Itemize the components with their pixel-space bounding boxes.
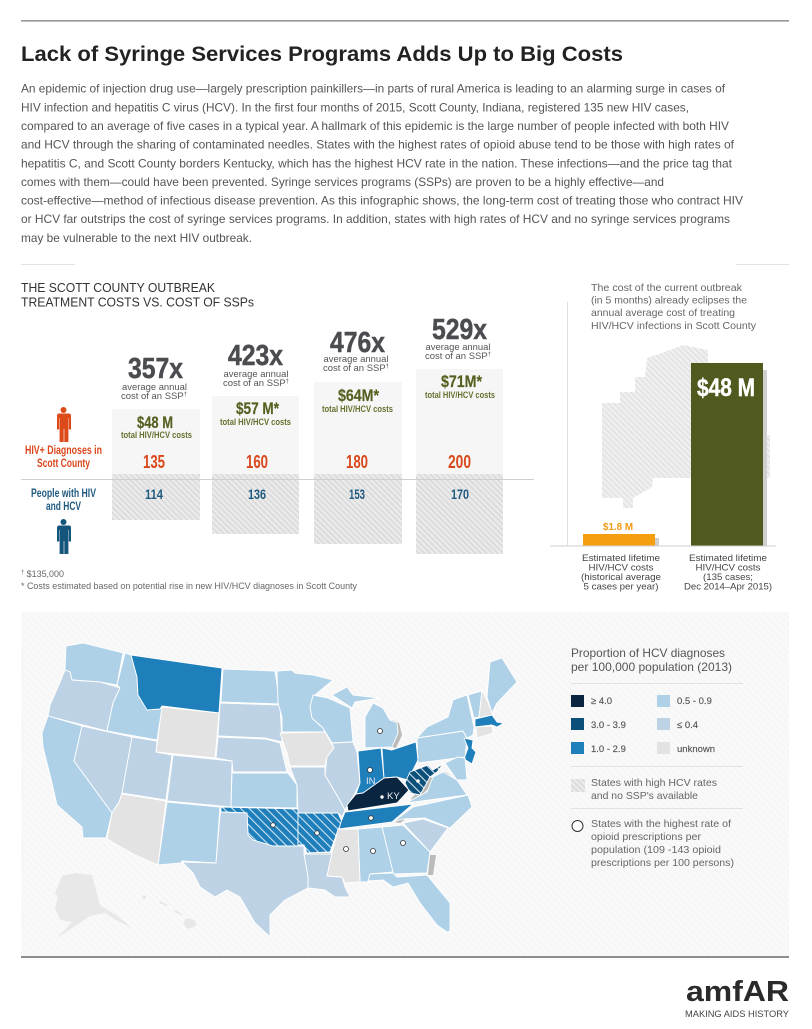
- bar caption: current outbreak: Dec 2014–Apr 2015): [684, 582, 772, 592]
- column: 200 cases: total HIV/HCV costs: [425, 390, 495, 400]
- column: 160 cases: 160: [246, 452, 268, 472]
- outbreak description: HIV/HCV infections in Scott County: [591, 320, 757, 332]
- column: 160 cases: 136: [248, 486, 266, 502]
- footnotes: †: [21, 570, 24, 576]
- column: 200 cases: †: [488, 352, 491, 358]
- legend: [571, 646, 743, 869]
- column: 200 cases: 200: [448, 452, 471, 472]
- label: HIV+ diagnoses: HIV+ Diagnoses in: [25, 445, 102, 457]
- outbreak description: (in 5 months) already eclipses the: [591, 294, 747, 306]
- legend: opioid marker: States with the highest rate of: [591, 818, 731, 830]
- intro paragraph: may be vulnerable to the next HIV outbreak.: [21, 231, 252, 245]
- column: 160 cases: 423x: [228, 340, 283, 372]
- column: 135 cases: 135: [143, 452, 165, 472]
- chart heading: TREATMENT COSTS VS. COST OF SSPs: [21, 294, 254, 310]
- amfAR logo: [685, 976, 789, 1019]
- state labels: IN: [366, 776, 376, 787]
- intro paragraph: cost-effective—method of infectious disease prevention. As this infographic shows, the long-term cost of treating those who contract HIV: [21, 194, 743, 208]
- column: 200 cases: cost of an SSP: [425, 351, 488, 362]
- bar caption: historical: [581, 553, 661, 592]
- bar caption: current outbreak: [684, 553, 772, 592]
- column: 135 cases: average annual: [122, 382, 187, 393]
- icon: blue person: [57, 519, 71, 554]
- legend colour scale: ≥ 4.0: [591, 696, 612, 707]
- Alaska and Hawaii: [55, 873, 196, 938]
- map of US states by HCV rate: [42, 643, 517, 938]
- label: people with HIV and HCV: [31, 488, 96, 513]
- state labels: [366, 776, 400, 802]
- legend: no SSP hatch: and no SSP's available: [591, 790, 698, 802]
- column: 180 cases: $64M*: [338, 386, 379, 405]
- column: 160 cases: $57 M*: [236, 399, 279, 418]
- column: 135 cases: [121, 353, 192, 502]
- footnotes: [21, 569, 357, 592]
- legend: opioid marker: opioid prescriptions per: [591, 831, 702, 843]
- map panel background: [21, 612, 789, 956]
- bar caption: current outbreak: Estimated lifetime: [689, 553, 767, 564]
- column: 200 cases: $71M*: [441, 372, 482, 391]
- column: 180 cases: cost of an SSP: [323, 363, 386, 374]
- intro paragraph: comes with them—could have been prevented. Syringe services programs (SSPs) are proven to be a highly effective—and: [21, 175, 664, 189]
- opioid prescription markers: [271, 728, 420, 854]
- footnotes: $135,000: [24, 569, 64, 580]
- outbreak description: annual average cost of treating: [591, 307, 735, 319]
- column: 200 cases: 529x: [432, 314, 487, 346]
- bar chart: outbreak cost comparison: $48 M: [697, 374, 755, 402]
- icon: orange person: [57, 407, 71, 442]
- chart heading: THE SCOTT COUNTY OUTBREAK: [21, 280, 215, 295]
- intro paragraph: hepatitis C, and Scott County borders Kentucky, which has the highest HCV rate in the nation. These infections—and the price tag that: [21, 156, 733, 170]
- legend colour scale: ≤ 0.4: [677, 720, 698, 731]
- column: 135 cases: $48 M: [137, 413, 173, 432]
- intro paragraph: [21, 82, 743, 245]
- legend: no SSP hatch: States with high HCV rates: [591, 777, 717, 789]
- intro paragraph: and HCV through the sharing of contaminated needles. States with the highest rates of opioid abuse tend to be those with high rates of: [21, 138, 735, 152]
- bar caption: current outbreak: (135 cases;: [703, 572, 753, 583]
- column: 200 cases: 170: [451, 486, 469, 502]
- amfAR logo: MAKING AIDS HISTORY: [685, 1009, 789, 1019]
- column: 180 cases: average annual: [324, 354, 388, 365]
- intro paragraph: HIV infection and hepatitis C virus (HCV). In the first four months of 2015, Scott County, Indiana, registered 135 new HIV cases,: [21, 100, 689, 114]
- chart heading: [21, 280, 254, 310]
- outbreak description: [591, 282, 757, 332]
- column: 180 cases: total HIV/HCV costs: [322, 404, 393, 414]
- column: 180 cases: †: [386, 364, 389, 370]
- column: 135 cases: 114: [145, 486, 163, 502]
- legend heading: Proportion of HCV diagnoses: [571, 646, 725, 660]
- legend: opioid marker: population (109 -143 opioid: [591, 844, 721, 856]
- central states: [182, 670, 398, 937]
- column: 160 cases: [220, 340, 291, 502]
- legend: opioid marker: [572, 818, 734, 869]
- column: 135 cases: †: [184, 392, 187, 398]
- amfAR logo: amfAR: [686, 976, 789, 1008]
- legend: no SSP hatch: [571, 777, 717, 802]
- column: 160 cases: total HIV/HCV costs: [220, 417, 291, 427]
- column: 180 cases: 153: [349, 486, 365, 502]
- bar caption: historical: 5 cases per year): [584, 582, 658, 592]
- legend heading: per 100,000 population (2013): [571, 660, 732, 674]
- bar chart: outbreak cost comparison: $1.8 M: [603, 522, 633, 533]
- column backgrounds: [21, 369, 534, 554]
- column: 160 cases: cost of an SSP: [223, 378, 286, 389]
- column: 160 cases: average annual: [224, 369, 288, 380]
- bar chart: outbreak cost comparison: [550, 302, 776, 546]
- label: HIV+ diagnoses: Scott County: [37, 458, 90, 470]
- column: 200 cases: [425, 314, 495, 502]
- bar caption: current outbreak: HIV/HCV costs: [696, 562, 761, 574]
- legend colour scale: 0.5 - 0.9: [677, 696, 712, 707]
- title: Lack of Syringe Services Programs Adds Up to Big Costs: [21, 42, 623, 66]
- state labels: KY: [387, 791, 400, 802]
- footnotes: * Costs estimated based on potential rise in new HIV/HCV diagnoses in Scott County: [21, 581, 357, 592]
- label: HIV+ diagnoses: [25, 445, 102, 470]
- column: 180 cases: 476x: [330, 327, 385, 359]
- column: 180 cases: 180: [346, 452, 368, 472]
- intro paragraph: or HCV far outstrips the cost of syringe services programs. In addition, states with high rates of HCV and no syringe services programs: [21, 212, 730, 226]
- column: 135 cases: total HIV/HCV costs: [121, 430, 192, 440]
- Scott County silhouette: [602, 345, 770, 508]
- legend: opioid marker: prescriptions per 100 persons): [591, 857, 734, 869]
- column: 135 cases: 357x: [128, 353, 183, 385]
- bar caption: historical: HIV/HCV costs: [588, 562, 654, 574]
- intro paragraph: An epidemic of injection drug use—largely prescription painkillers—in parts of rural America is leading to an alarming surge in cases of: [21, 82, 726, 96]
- legend colour scale: [571, 695, 715, 755]
- column: 160 cases: †: [286, 379, 289, 385]
- legend colour scale: 1.0 - 2.9: [591, 744, 626, 755]
- bar caption: historical: Estimated lifetime: [582, 553, 660, 564]
- label: people with HIV and HCV: and HCV: [46, 501, 81, 513]
- column: 135 cases: cost of an SSP: [121, 391, 184, 402]
- column: 180 cases: [322, 327, 393, 502]
- legend colour scale: unknown: [677, 744, 715, 755]
- bar caption: historical: (historical average: [581, 572, 661, 583]
- outbreak description: The cost of the current outbreak: [591, 282, 743, 294]
- eastern states: [327, 658, 517, 932]
- intro paragraph: compared to an average of five cases in a typical year. A hallmark of this epidemic is the large number of people infected with both HIV: [21, 119, 729, 133]
- legend colour scale: 3.0 - 3.9: [591, 720, 626, 731]
- western states: [42, 643, 297, 865]
- state shadows: [222, 720, 450, 882]
- column: 200 cases: average annual: [426, 342, 490, 353]
- legend heading: [571, 646, 732, 674]
- label: people with HIV and HCV: People with HIV: [31, 488, 96, 500]
